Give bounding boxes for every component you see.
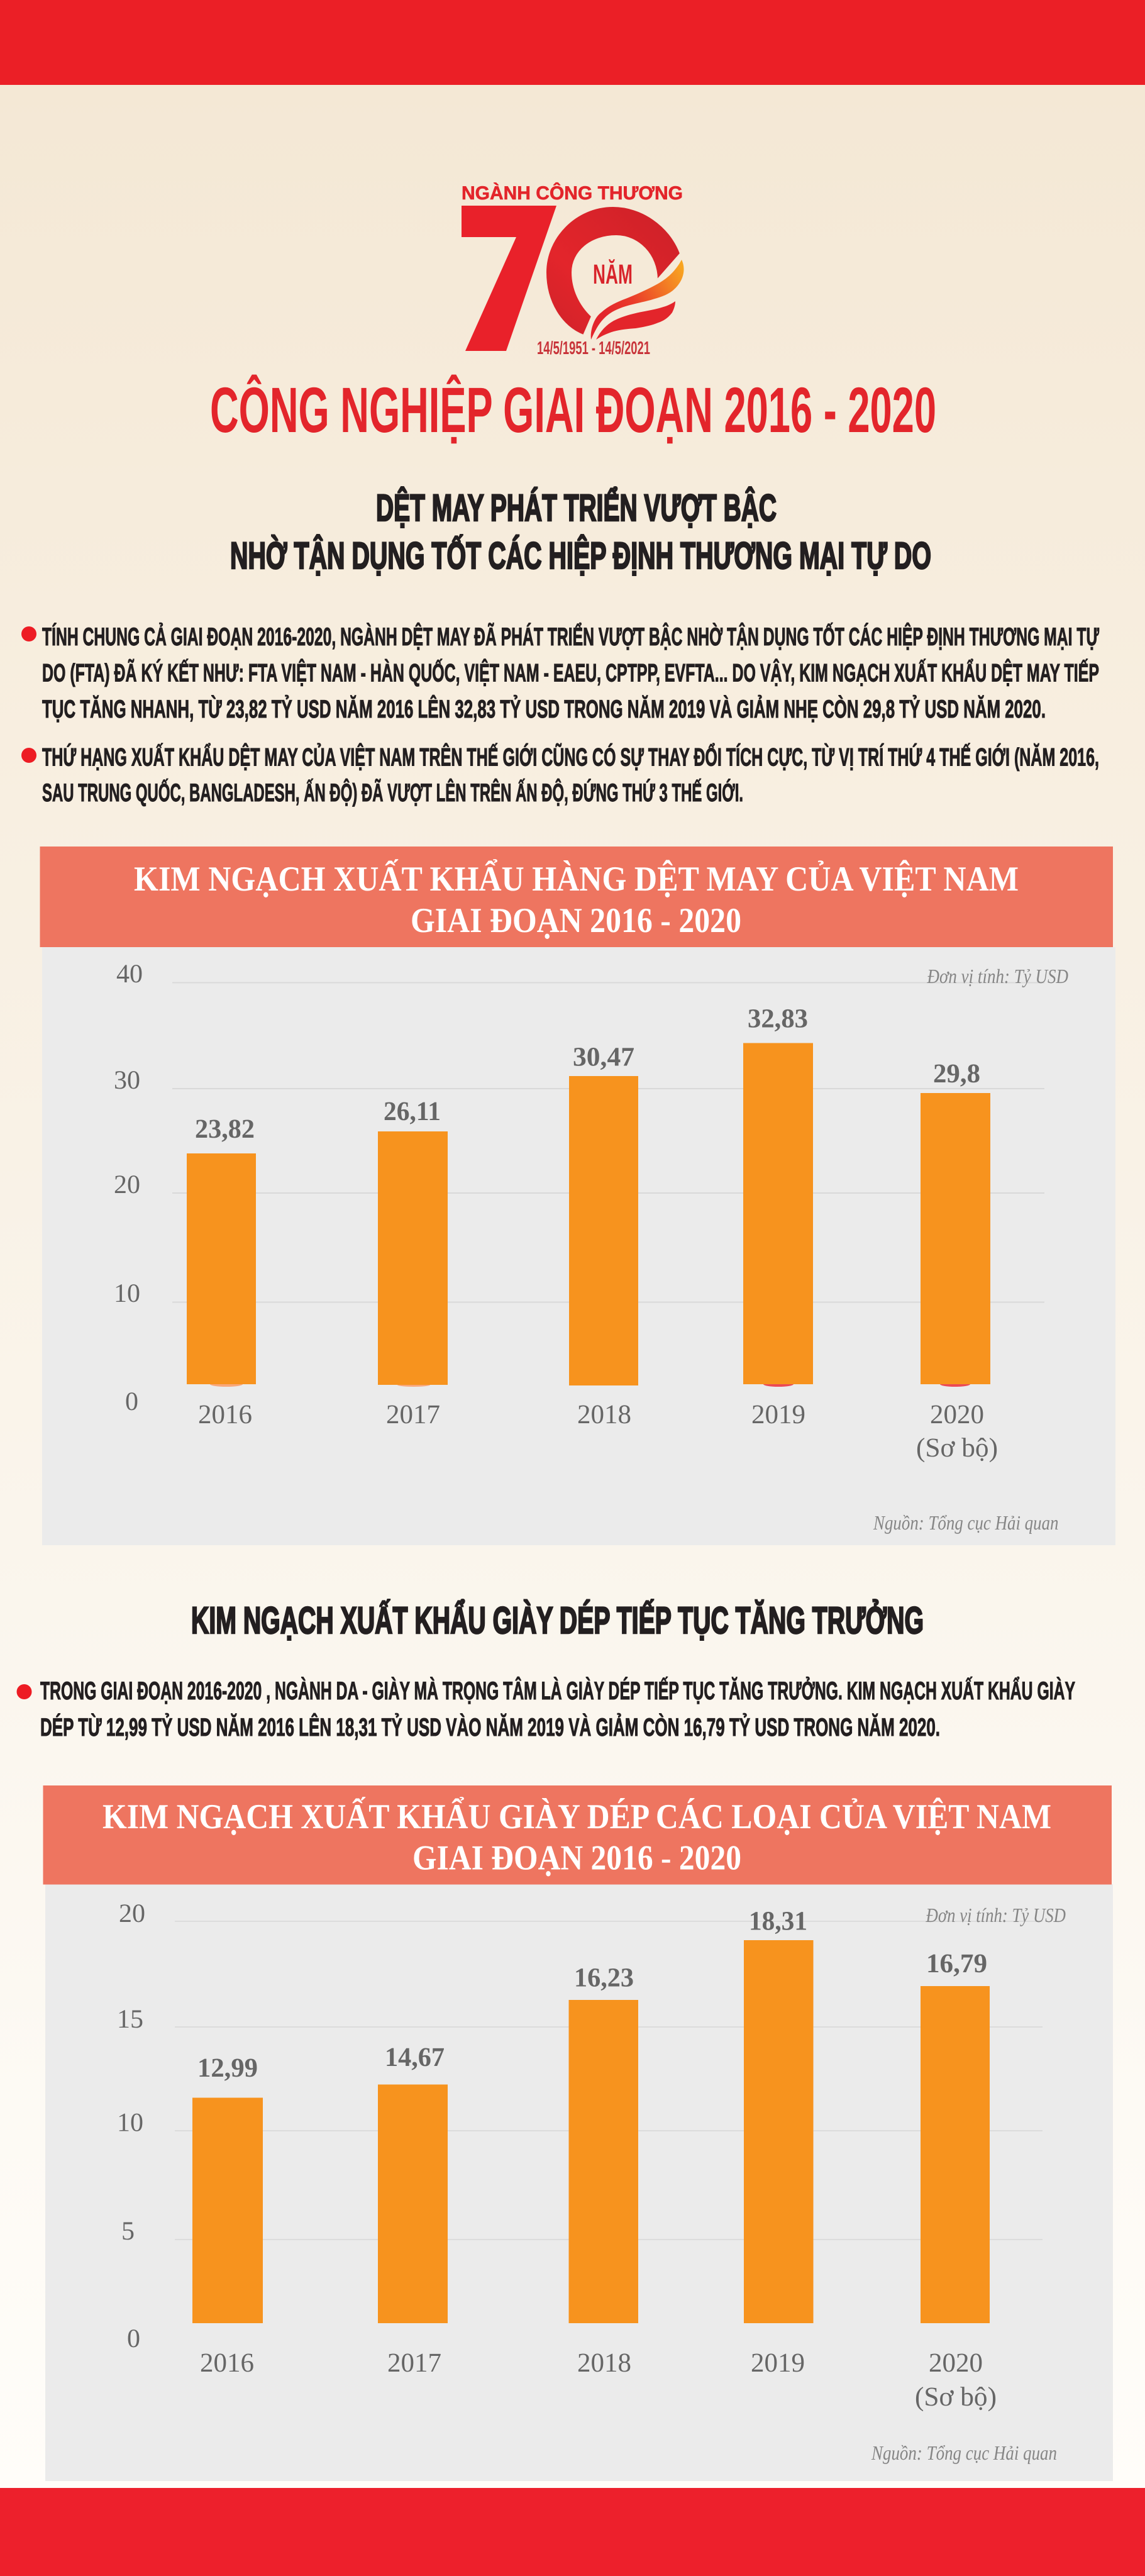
category labels: (Sơ bộ) xyxy=(915,2382,997,2412)
chart background xyxy=(45,1884,1113,2481)
unit note: Đơn vị tính: Tỷ USD xyxy=(927,965,1068,987)
y axis labels: 40 xyxy=(116,960,143,989)
numeral 7 xyxy=(462,206,556,351)
bars xyxy=(187,1043,990,1387)
bullet 2 block xyxy=(21,743,1099,807)
section 1 heading xyxy=(230,487,931,577)
chart header: KIM NGẠCH XUẤT KHẨU HÀNG DỆT MAY CỦA VIỆT NAM xyxy=(134,859,1019,899)
category labels: 2018 xyxy=(577,2348,631,2378)
value labels: 29,8 xyxy=(933,1059,980,1089)
value labels: 23,82 xyxy=(195,1114,255,1144)
y axis labels xyxy=(114,960,143,1416)
chart header: GIAI ĐOẠN 2016 - 2020 xyxy=(412,1839,741,1878)
bullet dot xyxy=(21,626,36,641)
category labels: 2020 xyxy=(929,2348,983,2378)
y axis labels: 10 xyxy=(117,2108,143,2137)
chart header xyxy=(43,1785,1112,1884)
bullet 1 block xyxy=(21,623,1100,723)
value labels: 18,31 xyxy=(749,1907,807,1936)
value labels: 32,83 xyxy=(748,1004,808,1034)
bullet text xyxy=(40,1677,1075,1741)
chart background xyxy=(42,947,1115,1545)
value labels: 16,23 xyxy=(574,1963,634,1992)
category labels: 2020 xyxy=(930,1400,984,1430)
category labels: 2019 xyxy=(751,1400,805,1430)
y axis labels: 20 xyxy=(119,1899,145,1928)
top red band xyxy=(0,0,1145,85)
value labels: 16,79 xyxy=(926,1949,987,1979)
panel: footwear export chart xyxy=(43,1785,1113,2481)
unit note: Đơn vị tính: Tỷ USD xyxy=(926,1904,1066,1926)
y axis labels xyxy=(117,1899,145,2353)
lower swoosh xyxy=(596,301,675,340)
value labels xyxy=(197,1907,987,2083)
category labels xyxy=(198,1400,998,1463)
logo caption: NGÀNH CÔNG THƯƠNG xyxy=(462,182,683,204)
category labels: 2019 xyxy=(751,2348,805,2378)
bottom red band xyxy=(0,2488,1145,2576)
bullet dot xyxy=(16,1684,31,1699)
bars xyxy=(192,1940,990,2323)
category labels: 2016 xyxy=(200,2348,254,2378)
y axis labels: 5 xyxy=(121,2217,135,2246)
panel: textile export chart xyxy=(40,847,1115,1545)
y axis labels: 10 xyxy=(114,1279,140,1308)
logo dates: 14/5/1951 - 14/5/2021 xyxy=(537,338,650,358)
bullet text xyxy=(42,743,1099,807)
logo: Ngành Công Thương 70 năm xyxy=(462,182,683,358)
bullet 3 block xyxy=(16,1677,1075,1741)
value labels xyxy=(195,1004,980,1144)
category labels: 2017 xyxy=(386,1400,440,1430)
category labels: (Sơ bộ) xyxy=(916,1433,998,1463)
source note: Nguồn: Tổng cục Hải quan xyxy=(873,1511,1059,1534)
bullet dot xyxy=(21,748,36,763)
y axis labels: 0 xyxy=(125,1387,138,1416)
chart header: GIAI ĐOẠN 2016 - 2020 xyxy=(411,901,741,940)
numeral 0 ring xyxy=(546,206,680,335)
category labels: 2016 xyxy=(198,1400,252,1430)
category labels: 2017 xyxy=(387,2348,441,2378)
source note: Nguồn: Tổng cục Hải quan xyxy=(871,2441,1057,2464)
chart header xyxy=(40,847,1113,947)
bullet text xyxy=(42,623,1100,723)
category labels: 2018 xyxy=(577,1400,631,1430)
chart header: KIM NGẠCH XUẤT KHẨU GIÀY DÉP CÁC LOẠI CỦA VIỆT NAM xyxy=(102,1797,1051,1836)
y axis labels: 20 xyxy=(114,1170,140,1199)
y axis labels: 30 xyxy=(114,1066,140,1095)
y axis labels: 0 xyxy=(127,2324,140,2353)
heading line 1: DỆT MAY PHÁT TRIỂN VƯỢT BẬC xyxy=(376,487,777,529)
value labels: 12,99 xyxy=(197,2053,258,2083)
value labels: 14,67 xyxy=(385,2043,445,2072)
logo word: năm: NĂM xyxy=(593,259,633,290)
upper swoosh xyxy=(591,260,683,340)
category labels xyxy=(200,2348,997,2412)
value labels: 26,11 xyxy=(384,1097,441,1126)
y axis labels: 15 xyxy=(117,2005,143,2034)
value labels: 30,47 xyxy=(573,1043,634,1072)
